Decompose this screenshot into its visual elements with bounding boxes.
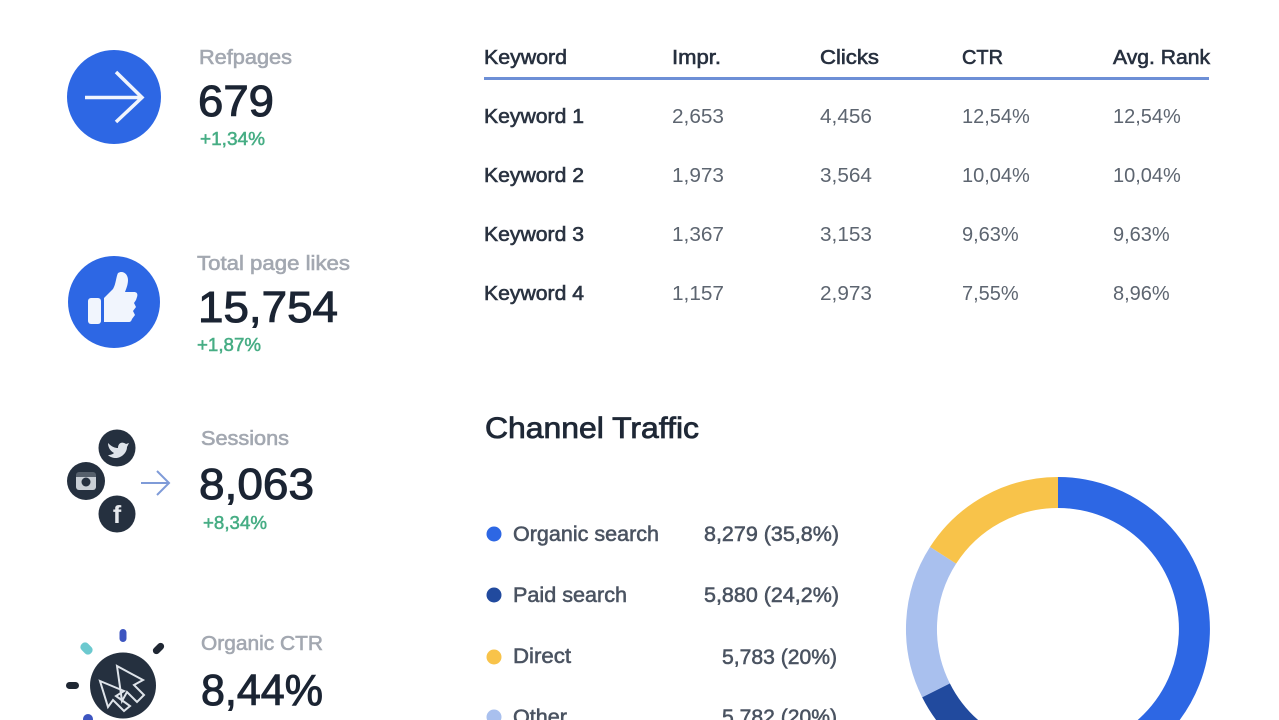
label: sessions: Sessions xyxy=(201,428,289,450)
table row: keyword 1: 12,54% xyxy=(1113,106,1181,128)
table row: keyword 3: 9,63% xyxy=(1113,224,1170,246)
value: 8,44%: 8,44% xyxy=(201,666,323,715)
table row: keyword 3 xyxy=(484,224,1170,246)
legend item: direct xyxy=(486,645,837,669)
legend item: paid search xyxy=(486,584,839,607)
icon: instagram xyxy=(67,462,105,500)
value: 8,063: 8,063 xyxy=(199,460,314,509)
table row: keyword 2: 3,564 xyxy=(820,165,872,187)
icon: twitter xyxy=(98,430,136,466)
table header: CTR xyxy=(962,47,1003,69)
heading: channel traffic: Channel Traffic xyxy=(485,412,699,445)
table row: keyword 4 xyxy=(484,283,1170,305)
table row: keyword 2: Keyword 2 xyxy=(484,165,584,187)
table row: keyword 3: 1,367 xyxy=(672,224,724,246)
change: sessions: +8,34% xyxy=(203,513,267,533)
table row: keyword 4: 2,973 xyxy=(820,283,872,305)
table row: keyword 2: 10,04% xyxy=(962,165,1030,187)
table row: keyword 1: Keyword 1 xyxy=(484,106,584,128)
label: total page likes: Total page likes xyxy=(197,253,350,275)
donut segment: paid search xyxy=(936,690,1058,720)
legend item: organic search xyxy=(486,523,839,546)
legend item: other xyxy=(486,706,837,720)
donut segment: direct xyxy=(943,492,1058,555)
table row: keyword 1: 12,54% xyxy=(962,106,1030,128)
table header: Keyword xyxy=(484,47,567,69)
icon: arrow in blue circle xyxy=(67,50,161,144)
table row: keyword 2: 1,973 xyxy=(672,165,724,187)
change: refpages: +1,34% xyxy=(200,129,265,149)
metric: organic ctr xyxy=(66,629,323,720)
table row: keyword 3: 9,63% xyxy=(962,224,1019,246)
legend item: paid search: Paid search xyxy=(513,584,627,607)
table header: Impr. xyxy=(672,47,721,69)
table: keywords xyxy=(484,47,1211,305)
table row: keyword 3: 3,153 xyxy=(820,224,872,246)
table row: keyword 4: 8,96% xyxy=(1113,283,1170,305)
donut segment: other xyxy=(921,555,943,690)
table row: keyword 4: 7,55% xyxy=(962,283,1019,305)
table header: Avg. Rank xyxy=(1113,47,1211,69)
label: refpages: Refpages xyxy=(199,47,292,69)
table row: keyword 3: Keyword 3 xyxy=(484,224,584,246)
table header: Clicks xyxy=(820,47,879,69)
icon: social networks with arrow xyxy=(67,430,169,532)
legend: channels xyxy=(486,523,839,720)
table row: keyword 2: 10,04% xyxy=(1113,165,1181,187)
legend item: direct: Direct xyxy=(513,645,571,668)
table row: keyword 4: 1,157 xyxy=(672,283,724,305)
legend item: direct: 5,783 (20%) xyxy=(722,646,837,669)
icon: facebook: f xyxy=(113,501,122,529)
icon: arrow xyxy=(141,471,169,495)
donut chart: channel traffic xyxy=(921,492,1194,720)
table row: keyword 4: Keyword 4 xyxy=(484,283,584,305)
table row: keyword 1 xyxy=(484,106,1181,128)
table row: keyword 2 xyxy=(484,165,1181,187)
table header xyxy=(484,47,1211,69)
legend item: paid search: 5,880 (24,2%) xyxy=(704,584,839,607)
change: page likes: +1,87% xyxy=(197,335,261,355)
icon: thumbs up in blue circle xyxy=(68,256,160,348)
value: 15,754: 15,754 xyxy=(198,283,338,332)
legend item: organic search: 8,279 (35,8%) xyxy=(704,523,839,546)
table row: keyword 1: 4,456 xyxy=(820,106,872,128)
donut segment: organic search xyxy=(1058,492,1194,720)
metric: sessions xyxy=(67,428,314,533)
legend item: organic search: Organic search xyxy=(513,523,659,546)
table row: keyword 1: 2,653 xyxy=(672,106,724,128)
value: 679: 679 xyxy=(198,77,274,126)
metric: total page likes xyxy=(68,253,350,355)
icon: cursor with sparks xyxy=(66,629,166,720)
metric: refpages xyxy=(67,47,292,149)
label: organic ctr: Organic CTR xyxy=(201,633,323,655)
